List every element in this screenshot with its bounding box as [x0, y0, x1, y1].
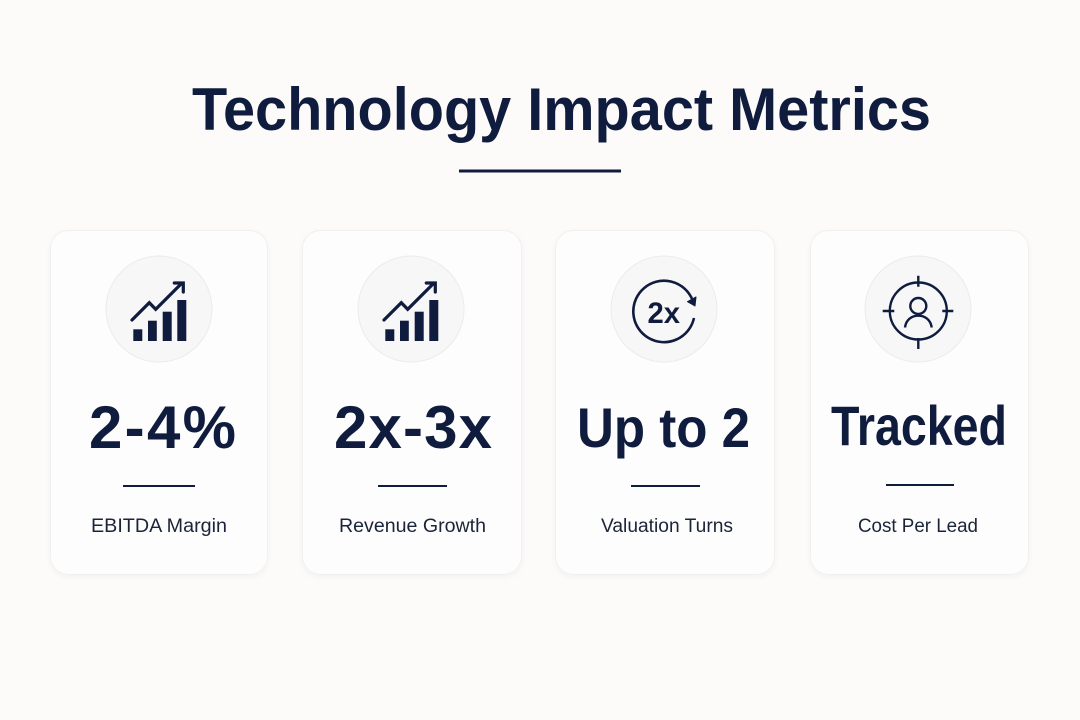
panel: Revenue Growth — [302, 230, 522, 574]
value: 2x-3x — [334, 394, 492, 461]
value: Up to 2 — [577, 396, 750, 459]
title: Technology Impact Metrics — [192, 76, 931, 143]
panel: Cost Per Lead — [810, 230, 1028, 574]
panel: EBITDA Margin — [50, 230, 268, 574]
label: Valuation Turns — [601, 516, 733, 537]
icon: growth chart — [358, 256, 464, 362]
value: Tracked — [831, 394, 1007, 457]
icon: 2x cycle — [611, 256, 717, 362]
label: EBITDA Margin — [91, 516, 227, 537]
icon: growth chart — [106, 256, 212, 362]
icon: target person — [865, 256, 971, 362]
label: Revenue Growth — [339, 516, 486, 537]
value: 2-4% — [89, 394, 236, 461]
panel: Valuation Turns — [556, 230, 774, 574]
icon: 2x cycle: 2x — [648, 297, 680, 330]
label: Cost Per Lead — [858, 516, 978, 537]
